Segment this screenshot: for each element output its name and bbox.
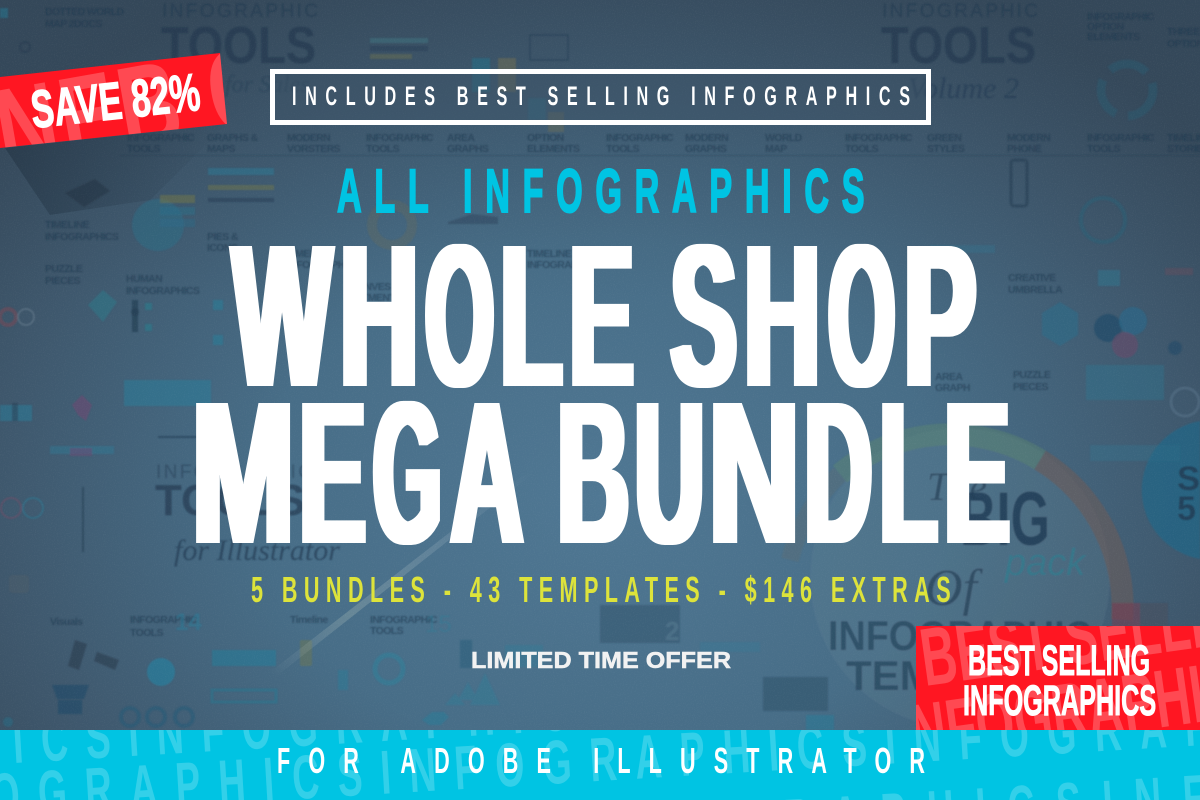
ghost: top right tools cover <box>881 1 1040 105</box>
ghost: top left tools cover: TOOLS <box>161 17 316 75</box>
band label: FOR ADOBE ILLUSTRATOR <box>277 741 925 781</box>
ghost: column headings: HUMAN <box>126 273 162 285</box>
ghost: column headings: PHONE <box>1007 143 1042 155</box>
ghost: column headings: GRAPH <box>447 259 482 271</box>
ghost: lower left tools cover: INFOGRAPHIC <box>156 462 314 483</box>
ghost: column headings: GRAPHS <box>447 143 489 155</box>
ghost: column headings: OPTION <box>1087 21 1124 33</box>
limited time offer: LIMITED TIME OFFER <box>471 647 731 673</box>
ghost: big pack circle: The <box>927 464 987 509</box>
title line 2: E <box>300 360 366 587</box>
title line 1: H <box>340 203 418 430</box>
ghost: column headings: PIES & <box>207 231 239 243</box>
ghost: column headings: ELEMENTS <box>1087 31 1140 43</box>
ghost: column headings: TIMELINE <box>287 248 332 260</box>
ghost: column headings: OPTION <box>527 132 564 144</box>
ghost: top left tools cover: for Sales <box>225 72 310 98</box>
title line 2: A <box>451 360 521 587</box>
badge: best selling infographics <box>916 626 1200 730</box>
badge ribbon <box>0 53 227 148</box>
ghost: big pack circle: Of <box>925 560 984 617</box>
ghost: column headings: INFOGRAPHICS <box>126 285 200 297</box>
ghost: column headings: INFOGRAPHICS <box>45 231 119 243</box>
ghost: big pack circle: S <box>1177 460 1200 498</box>
ghost: column headings: ELEMENTS <box>527 143 580 155</box>
ghost: big pack circle: INFOGRAPHIC <box>828 612 1092 659</box>
title line 1: P <box>904 203 976 430</box>
footer band <box>0 730 1200 800</box>
title line 2: G <box>373 360 441 587</box>
ghost: column headings: INFOGRAPHIC <box>1087 132 1155 144</box>
text: E <box>945 360 1010 587</box>
ghost: column headings: INVES <box>362 281 391 293</box>
light streak <box>270 470 534 675</box>
ghost: lower left tools cover: TOOLS <box>155 476 305 525</box>
ghost: column headings: STYLES <box>927 143 965 155</box>
subtitle: all infographics: ALL INFOGRAPHICS <box>337 158 865 226</box>
ghost: top right tools cover: Volume 2 <box>908 72 1019 105</box>
ghost: top right tools cover: TOOLS <box>881 17 1036 75</box>
ghost: column headings: DOTTED WORLD <box>45 6 125 18</box>
ghost: column headings: AREA <box>935 371 963 383</box>
ghost: column headings: GRAPHS <box>685 143 727 155</box>
ghost: column headings: INFOGRAPHIC <box>127 132 195 144</box>
ghost: small charts: Timeline <box>290 614 328 626</box>
ghost: column headings: LINE <box>447 248 469 260</box>
title line 1: O <box>425 203 494 430</box>
title line 2: B <box>558 360 629 587</box>
title line 1: H <box>744 203 820 430</box>
title line 1: E <box>570 203 634 430</box>
ghost: column headings: ICONS <box>207 242 238 254</box>
ghost: column headings: INFOGRAPHICS <box>287 259 361 271</box>
ghost: small charts: 15 <box>425 611 452 638</box>
ghost: column headings: VORSTERS <box>287 143 341 155</box>
ghost: column headings: MODERN <box>685 132 728 144</box>
ghost: small charts: INFOGRAPHIC <box>370 614 438 626</box>
title line 2: N <box>709 360 800 587</box>
banner: includes best selling infographics <box>272 72 928 122</box>
ghost: big pack circle <box>790 421 1200 728</box>
ghost: small charts: TOOLS <box>370 625 404 637</box>
title <box>192 203 1010 587</box>
ghost: column headings: THREE <box>1167 26 1200 38</box>
ghost: top right tools cover: INFOGRAPHIC <box>882 1 1040 22</box>
ghost: column headings: PIECES <box>45 275 81 287</box>
ghost: column headings: MAP 2DOCS <box>45 18 102 30</box>
ghost: column headings: INFOGRAPHIC <box>845 132 913 144</box>
ghost: column headings: PUZZLE <box>45 263 83 275</box>
ghost: big pack circle: TEM <box>846 652 935 699</box>
ghost: column headings: MAP <box>765 143 787 155</box>
ghost: column headings <box>45 6 1200 394</box>
badge label: SAVE 82% <box>28 64 203 140</box>
ghost: column headings: TIMELINE <box>527 248 572 260</box>
ghost: column headings: TOOLS <box>845 143 879 155</box>
ghost: column headings: GREEN <box>927 132 961 144</box>
ghost: column headings: INFOGRAPHIC <box>366 132 434 144</box>
ghost: column headings: INFOGRAPHICS <box>527 259 601 271</box>
ghost: column headings: MODERN <box>1007 132 1050 144</box>
ghost: column headings: PUZZLE <box>1013 369 1051 381</box>
title line 1: S <box>671 203 737 430</box>
title line 1: O <box>829 203 895 430</box>
ghost: big pack circle: 5 <box>1177 490 1196 528</box>
ghost: top left tools cover <box>161 1 320 98</box>
ghost: column headings: WORLD <box>765 132 803 144</box>
badge shadow <box>5 124 227 215</box>
badge: best selling infographics: INFOGRAPHICS <box>963 677 1156 725</box>
badge label: BEST SELLING <box>968 637 1150 685</box>
band ghost lettering <box>0 730 1200 800</box>
ghost: small charts: INFOGRAPHIC <box>130 614 198 626</box>
ghost: lower left tools cover: for Illustrator <box>174 534 340 567</box>
ghost: column headings: INFOGRAPHIC <box>606 132 674 144</box>
ghost: small charts: 2 <box>665 616 679 646</box>
banner: includes best selling infographics: INCLUDES BEST SELLING INFOGRAPHICS <box>292 81 910 111</box>
ghost: column headings: TOOLS <box>1087 143 1121 155</box>
ghost: column headings: MAPS <box>207 143 236 155</box>
ghost: big pack circle: BIG <box>960 477 1050 562</box>
ghost: column headings: TOOLS <box>127 143 161 155</box>
stats line: 5 BUNDLES - 43 TEMPLATES - $146 EXTRAS <box>251 570 951 610</box>
title line 1: L <box>500 203 562 430</box>
ghost: column headings: CREATIVE <box>1008 272 1056 284</box>
ghost: column headings: UMBRELLA <box>1008 284 1063 296</box>
ghost: column headings: TIMELINE <box>45 219 90 231</box>
ghost: column headings: AREA <box>447 132 475 144</box>
title line 1: W <box>232 203 332 430</box>
badge: save 82% <box>0 53 227 215</box>
ghost: small charts: TOOLS <box>130 627 164 639</box>
ghost: column headings: TOOLS <box>606 143 640 155</box>
ghost: column headings: GRAPHS & <box>207 132 259 144</box>
title line 2: D <box>805 360 872 587</box>
ghost: column headings: GRAPH <box>935 382 970 394</box>
ghost: small charts: 14 <box>175 609 202 636</box>
ghost: lower left tools cover <box>155 436 340 567</box>
ghost: column headings: INFOGRAPHIC <box>1087 11 1155 23</box>
ghost: big pack circle: pack <box>1004 542 1087 584</box>
ghost: column headings: TMENT <box>362 292 396 304</box>
ghost: small charts: Visuals <box>50 616 83 628</box>
title line 2: L <box>880 360 937 587</box>
ghost: column headings: MODERN <box>287 132 330 144</box>
ghost: top left tools cover: INFOGRAPHIC <box>162 1 320 22</box>
title line 2: M <box>192 360 294 587</box>
title line 2: U <box>635 360 704 587</box>
ghost: column headings: PIECES <box>1013 381 1049 393</box>
ghost: column headings: TOOLS <box>366 143 400 155</box>
